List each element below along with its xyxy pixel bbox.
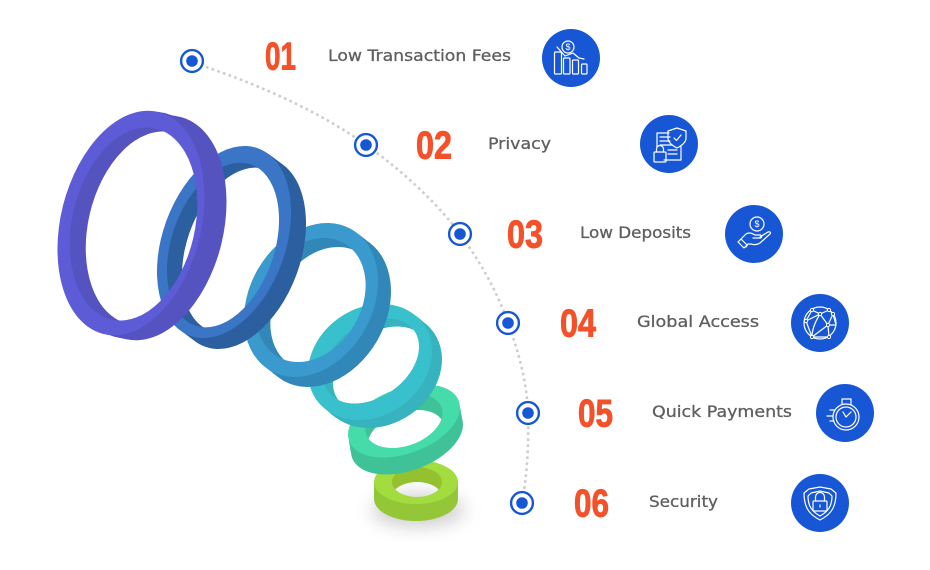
- row 04: [497, 294, 849, 352]
- ring 3: sky blue: [244, 223, 391, 387]
- icon: stopwatch: [816, 384, 874, 442]
- row 06: [511, 474, 849, 532]
- number 02: 02: [416, 124, 452, 168]
- label 01: Low Transaction Fees: [328, 46, 511, 65]
- number 05: 05: [578, 392, 613, 436]
- number 04: 04: [560, 302, 596, 346]
- marker 02: [355, 134, 377, 156]
- ring shadow: [372, 494, 464, 526]
- icon: shield with lock: [791, 474, 849, 532]
- icon: falling fees chart: [542, 29, 600, 87]
- dotted curve: [206, 67, 528, 503]
- label 05: Quick Payments: [652, 402, 792, 421]
- number 01: 01: [265, 36, 296, 78]
- row 02: [355, 115, 698, 173]
- marker 03: [449, 223, 471, 245]
- marker 06: [511, 492, 533, 514]
- row 01: [181, 29, 600, 87]
- number 06: 06: [574, 482, 609, 526]
- label 04: Global Access: [637, 312, 759, 331]
- row 05: [517, 384, 874, 442]
- number 03: 03: [507, 214, 543, 256]
- marker 04: [497, 312, 519, 334]
- marker 05: [517, 402, 539, 424]
- row 03: [449, 205, 783, 263]
- icon: hand holding coin: [725, 205, 783, 263]
- label 03: Low Deposits: [580, 223, 691, 242]
- ring 4: teal: [309, 304, 442, 428]
- icon: document with shield and lock: [640, 115, 698, 173]
- ring 5: green: [348, 385, 463, 474]
- ring 1: violet: [58, 110, 226, 340]
- marker 01: [181, 50, 203, 72]
- icon: network globe: [791, 294, 849, 352]
- icon: hand holding coin: $: [754, 219, 760, 229]
- label 02: Privacy: [488, 134, 551, 153]
- label 06: Security: [649, 492, 718, 511]
- ring 6: lime: [374, 460, 458, 521]
- ring 2: blue: [157, 146, 306, 349]
- icon: falling fees chart: $: [565, 42, 571, 52]
